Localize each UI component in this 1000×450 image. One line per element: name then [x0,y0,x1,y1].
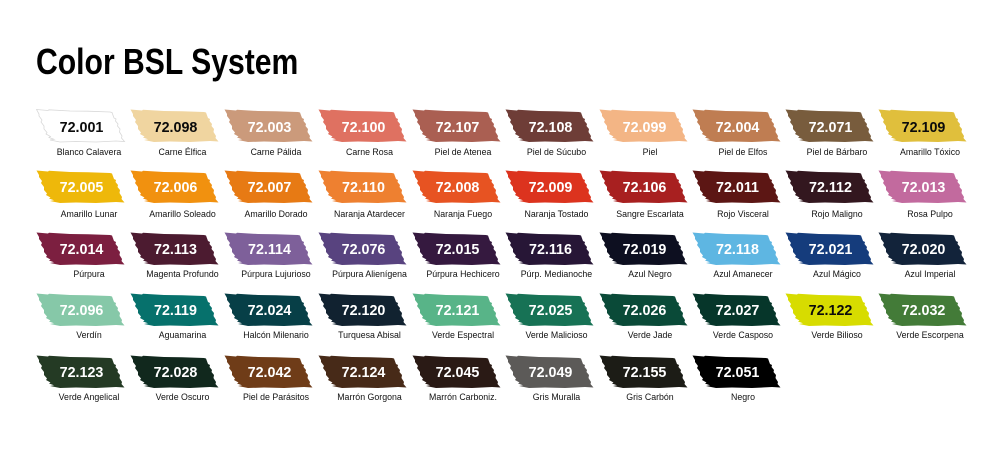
swatch: 72.110 [318,170,406,219]
swatch: 72.099: 72.099 [623,120,666,136]
swatch: 72.011: Rojo Visceral [717,209,769,219]
swatch: 72.007 [224,170,312,219]
swatch: 72.020: Azul Imperial [905,269,955,279]
swatch: 72.114 [224,232,312,279]
swatch: 72.013 [878,170,966,219]
swatch: 72.106: Sangre Escarlata [616,209,684,219]
swatch: 72.108 [506,110,594,157]
swatch: 72.021: 72.021 [809,242,852,258]
swatch: 72.096: 72.096 [60,303,103,319]
swatch: 72.019 [600,232,688,279]
swatch: 72.107: Piel de Atenea [435,147,491,157]
swatch: 72.045: 72.045 [436,364,479,380]
swatch: 72.124: 72.124 [342,364,385,380]
swatch: 72.020 [878,232,966,279]
swatch: 72.042: Piel de Parásitos [243,392,309,402]
swatch: 72.106 [600,170,688,219]
swatch: 72.003: Carne Pálida [251,147,301,157]
swatch: 72.049: 72.049 [529,364,572,380]
swatch: 72.027: 72.027 [716,303,759,319]
swatch: 72.013: Rosa Pulpo [907,209,953,219]
swatch: 72.032: Verde Escorpena [896,330,964,340]
swatch: 72.076: 72.076 [342,242,385,258]
swatch: 72.124: Marrón Gorgona [337,392,402,402]
swatch: 72.009 [506,170,594,219]
swatch: 72.025: Verde Malicioso [525,330,588,340]
swatch: 72.113 [130,232,219,279]
swatch: 72.099: Piel [643,147,657,157]
swatch: 72.007: Amarillo Dorado [244,209,308,219]
swatch: 72.124 [318,354,410,410]
swatch: 72.024: Halcón Milenario [243,330,309,340]
swatch: 72.032: 72.032 [902,303,945,319]
swatch: 72.108: 72.108 [529,120,572,136]
swatch: 72.028 [130,354,222,410]
swatch: 72.026: 72.026 [623,303,666,319]
swatch: 72.003: 72.003 [248,120,291,136]
swatch: 72.051 [692,354,784,410]
swatch: 72.071 [786,110,874,157]
swatch: 72.098: 72.098 [154,120,197,136]
swatch: 72.119 [130,294,218,340]
swatch: 72.076 [318,232,407,279]
swatch: 72.026: Verde Jade [628,330,672,340]
swatch: 72.008: Naranja Fuego [434,209,492,219]
swatch: 72.045 [412,354,504,410]
title: Color BSL System [36,41,298,82]
swatch: 72.008 [412,170,500,219]
swatch: 72.026 [600,294,688,340]
swatch: 72.119: 72.119 [154,303,197,319]
swatch: 72.011 [692,170,780,219]
swatch: 72.005: Amarillo Lunar [61,209,117,219]
swatch: 72.021: Azul Mágico [813,269,861,279]
swatch: 72.116: 72.116 [529,242,572,258]
swatch: 72.100: Carne Rosa [346,147,393,157]
swatch: 72.123: Verde Angelical [59,392,119,402]
swatch: 72.027 [692,294,780,340]
swatch: 72.025: 72.025 [529,303,572,319]
swatch: 72.112 [786,170,874,219]
swatch: 72.006: 72.006 [154,180,197,196]
swatch: 72.121: 72.121 [436,303,479,319]
swatch: 72.013: 72.013 [902,180,945,196]
swatch: 72.109: 72.109 [902,120,945,136]
swatch: 72.114: Púrpura Lujurioso [241,269,311,279]
swatch: 72.118: 72.118 [716,242,759,258]
swatch: 72.122: Verde Bilioso [811,330,863,340]
swatch: 72.110: Naranja Atardecer [334,209,405,219]
swatch: 72.019: Azul Negro [628,269,672,279]
swatch: 72.112: Rojo Maligno [811,209,863,219]
swatch: 72.106: 72.106 [623,180,666,196]
swatch: 72.071: Piel de Bárbaro [807,147,867,157]
swatch: 72.005: 72.005 [60,180,103,196]
swatch: 72.107: 72.107 [436,120,479,136]
swatch: 72.006: Amarillo Soleado [149,209,216,219]
swatch: 72.121: Verde Espectral [432,330,494,340]
swatch: 72.051: 72.051 [716,364,759,380]
swatch: 72.042: 72.042 [248,364,291,380]
swatch: 72.007: 72.007 [248,180,291,196]
swatch: 72.109: Amarillo Tóxico [900,147,960,157]
swatch: 72.005 [36,170,124,219]
swatch: 72.019: 72.019 [623,242,666,258]
swatch: 72.001: Blanco Calavera [57,147,121,157]
swatch: 72.024: 72.024 [248,303,291,319]
swatch: 72.112: 72.112 [809,180,852,196]
swatch: 72.123: 72.123 [60,364,103,380]
swatch: 72.049 [505,354,597,410]
swatch: 72.116: Púrp. Medianoche [521,269,592,279]
swatch: 72.108: Piel de Súcubo [527,147,586,157]
swatch: 72.045: Marrón Carboniz. [429,392,497,402]
swatch: 72.003 [224,110,312,157]
swatch: 72.004: Piel de Elfos [719,147,767,157]
swatch: 72.028: 72.028 [154,364,197,380]
swatch: 72.155 [599,354,691,410]
swatch: 72.120: 72.120 [342,303,385,319]
swatch: 72.015: 72.015 [436,242,479,258]
swatch: 72.027: Verde Casposo [713,330,773,340]
swatch: 72.042 [224,354,316,410]
swatch: 72.001 [36,109,126,157]
swatch: 72.024 [224,294,312,340]
swatch: 72.107 [412,110,500,157]
swatch: 72.098 [130,110,218,157]
swatch: 72.114: 72.114 [248,242,291,258]
swatch: 72.008: 72.008 [436,180,479,196]
swatch: 72.001: 72.001 [60,120,103,136]
swatch: 72.099 [600,110,688,157]
swatch: 72.155: Gris Carbón [626,392,674,402]
swatch: 72.110: 72.110 [342,180,385,196]
swatch: 72.113: Magenta Profundo [146,269,219,279]
swatch: 72.015 [412,232,500,279]
swatch: 72.121 [412,294,500,340]
swatch: 72.098: Carne Élfica [159,147,206,157]
swatch: 72.004 [692,110,780,157]
swatch: 72.109 [878,110,966,157]
swatch: 72.025 [506,294,594,340]
swatch: 72.004: 72.004 [716,120,759,136]
swatch: 72.118: Azul Amanecer [713,269,773,279]
swatch: 72.116 [506,232,594,279]
swatch: 72.006 [130,170,218,219]
swatch: 72.051: Negro [731,392,755,402]
swatch: 72.122 [786,294,874,340]
swatch: 72.014: Púrpura [73,269,105,279]
swatch: 72.014: 72.014 [60,242,103,258]
swatch: 72.021 [786,232,874,279]
swatch: 72.123 [36,354,128,410]
swatch: 72.028: Verde Oscuro [156,392,209,402]
swatch: 72.122: 72.122 [809,303,852,319]
swatch: 72.071: 72.071 [809,120,852,136]
swatch: 72.015: Púrpura Hechicero [426,269,500,279]
swatch: 72.120 [318,294,406,340]
swatch: 72.155: 72.155 [623,364,666,380]
swatch: 72.076: Púrpura Alienígena [332,269,407,279]
swatch: 72.096: Verdín [76,330,102,340]
swatch: 72.113: 72.113 [154,242,197,258]
swatch: 72.119: Aguamarina [159,330,206,340]
swatch: 72.100 [318,110,406,157]
swatch: 72.120: Turquesa Abisal [338,330,401,340]
swatch: 72.118 [692,232,780,279]
swatch: 72.014 [36,232,124,279]
swatch: 72.011: 72.011 [716,180,759,196]
swatch: 72.020: 72.020 [902,242,945,258]
swatch: 72.100: 72.100 [342,120,385,136]
swatch: 72.009: 72.009 [529,180,572,196]
swatch: 72.032 [878,294,966,340]
swatch: 72.049: Gris Muralla [533,392,580,402]
swatch: 72.096 [36,294,124,340]
swatch: 72.009: Naranja Tostado [525,209,588,219]
